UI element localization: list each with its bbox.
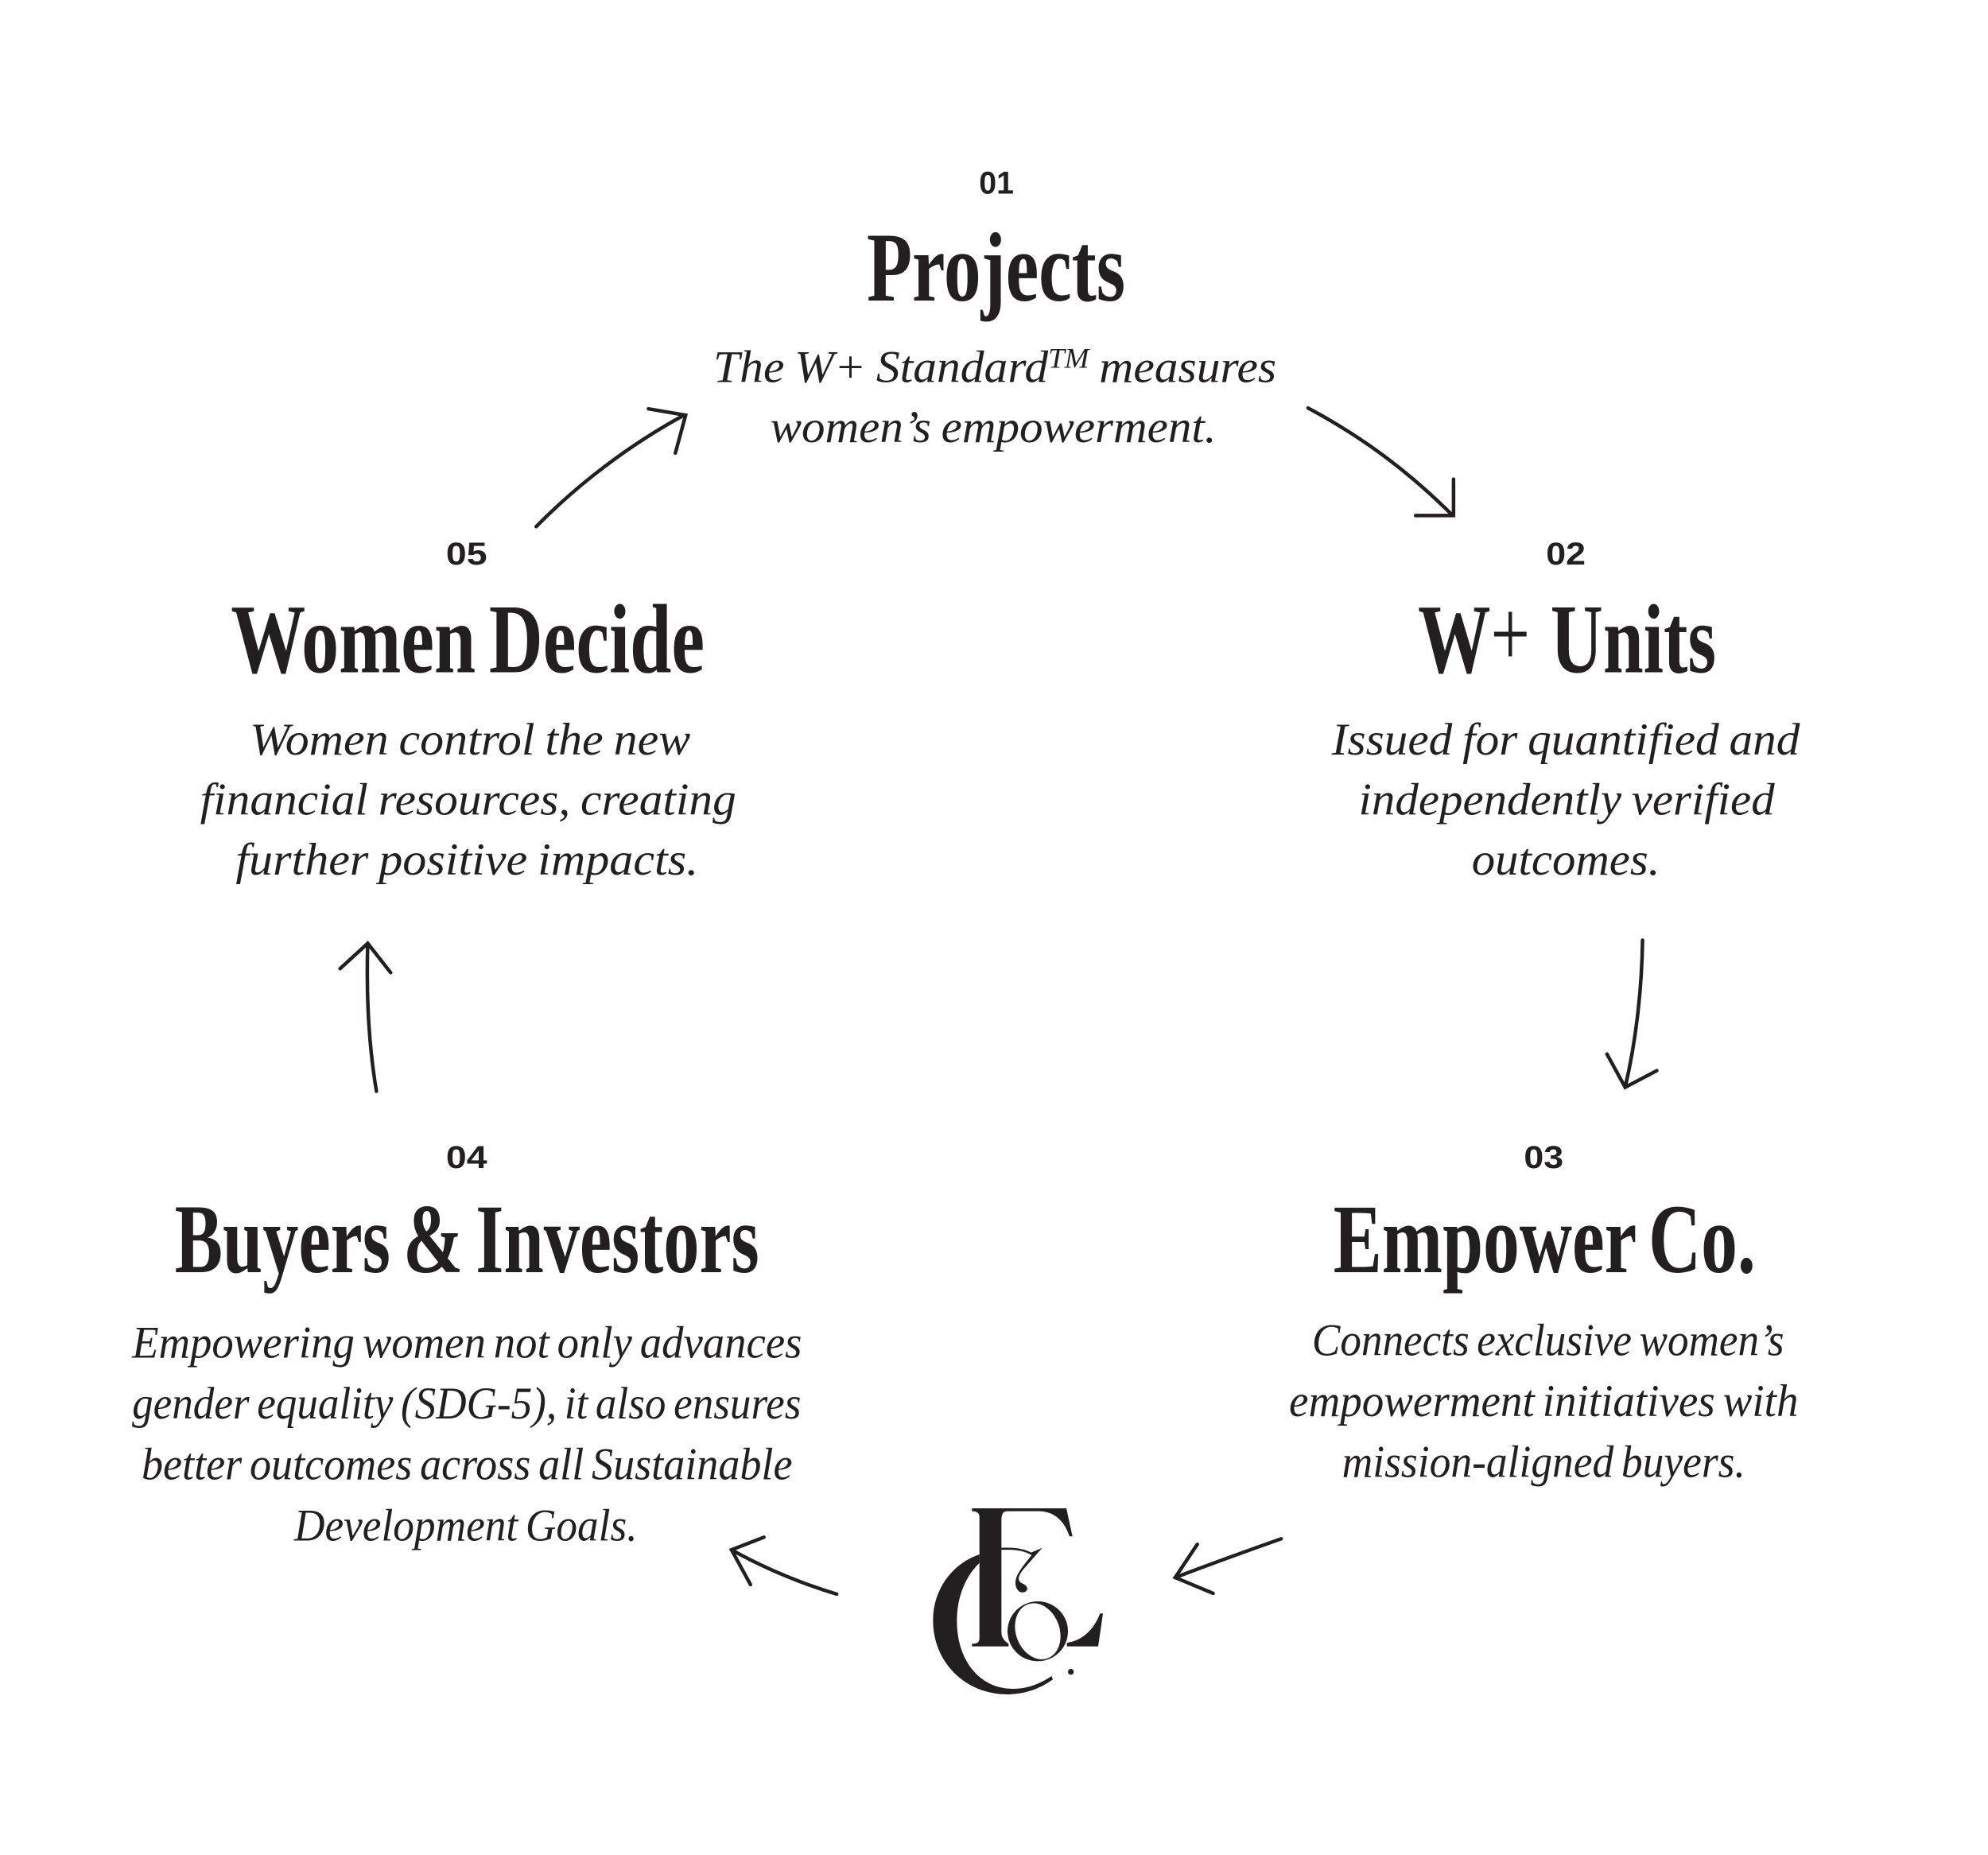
- description: Empower Co.: empowerment initiatives with: [1289, 1376, 1798, 1426]
- description: Empower Co.: mission-aligned buyers.: [1342, 1438, 1745, 1488]
- step number 02: 02: [1546, 537, 1586, 572]
- description: Buyers & Investors: Development Goals.: [293, 1500, 638, 1550]
- panel: step 04 Buyers & Investors: [131, 1140, 802, 1550]
- description: issued units: Issued for quantified and: [1331, 715, 1800, 765]
- panel: step 02 W+ Units: [1331, 537, 1800, 885]
- step number 03: 03: [1524, 1140, 1563, 1175]
- description: Women Decide: financial resources, creating: [200, 774, 736, 825]
- arrow: Empower Co. to logo: [1175, 1539, 1281, 1593]
- heading: W+ Units: Units: [1530, 584, 1716, 693]
- icon: Empower Co. monogram logo: [933, 1508, 1103, 1694]
- heading: Women Decide: Women Decide: [231, 584, 705, 693]
- heading: Buyers & Investors: Buyers & Investors: [175, 1184, 759, 1294]
- description: Buyers & Investors: Empowering women not only advances: [131, 1318, 802, 1368]
- arrow: Buyers & Investors to Women Decide: [340, 943, 390, 1091]
- step number 04: 04: [446, 1140, 487, 1175]
- description: Buyers & Investors: gender equality (SDG-5), it also ensures: [132, 1379, 801, 1429]
- heading: W+ Units: +: [1491, 581, 1530, 686]
- description: W+ Standard: measures: [1089, 342, 1276, 392]
- heading: W+ Units: W: [1418, 584, 1516, 693]
- panel: step 03 Empower Co.: [1289, 1140, 1798, 1488]
- description: Women Decide: further positive impacts.: [235, 835, 698, 885]
- heading: Empower Co.: Empower Co.: [1334, 1184, 1756, 1294]
- arrow: logo to Buyers & Investors: [732, 1537, 837, 1594]
- description: Women Decide: [200, 715, 736, 885]
- heading: Projects: Projects: [867, 212, 1125, 322]
- description: Women Decide: Women control the new: [250, 715, 691, 765]
- description: Empower Co.: [1289, 1316, 1798, 1488]
- arrow: Projects to W+ Units: [1308, 408, 1454, 515]
- description: issued units: independently verified: [1359, 774, 1775, 825]
- description: Buyers & Investors: better outcomes across all Sustainable: [142, 1440, 792, 1490]
- arrow: Women Decide to Projects: [536, 409, 685, 526]
- step number 05: 05: [446, 537, 487, 572]
- description: issued units: [1331, 715, 1800, 885]
- description: W+ Standard: women’s empowerment.: [771, 402, 1217, 452]
- description: W+ Standard: The W+ Standard: [713, 342, 1038, 392]
- description: W+ Standard: TM: [1048, 342, 1091, 374]
- description: issued units: outcomes.: [1472, 835, 1660, 885]
- arrow: W+ Units to Empower Co.: [1607, 940, 1656, 1087]
- description: Empower Co.: Connects exclusive women’s: [1312, 1316, 1784, 1366]
- panel: step 01 Projects: [713, 166, 1276, 452]
- description: W+ Standard: [713, 342, 1276, 452]
- panel: step 05 Women Decide: [200, 537, 736, 885]
- description: Buyers & Investors: [131, 1318, 802, 1550]
- step number 01: 01: [979, 166, 1014, 201]
